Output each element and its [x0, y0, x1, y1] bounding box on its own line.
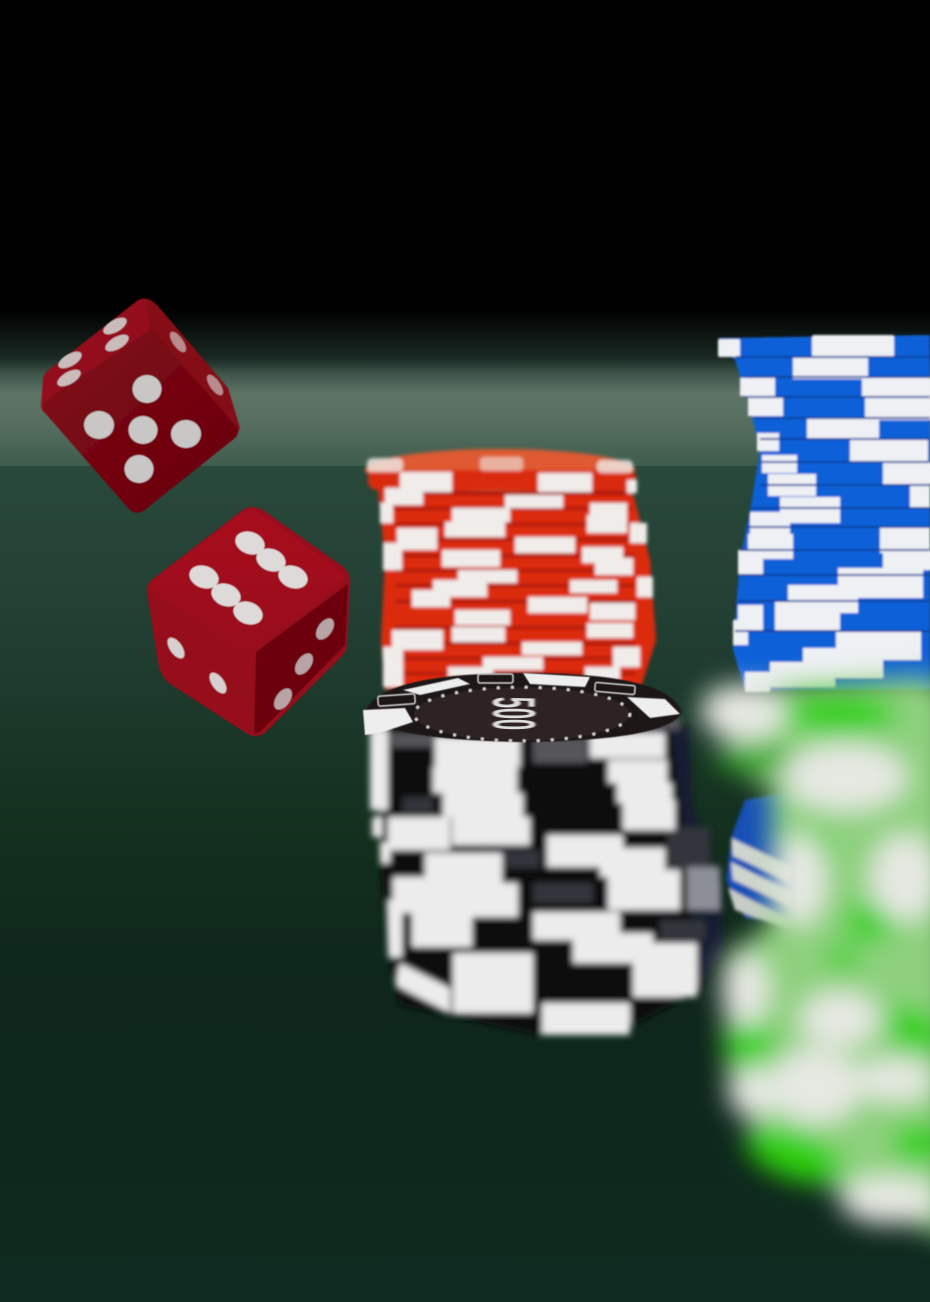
- top-right face: [146, 299, 240, 436]
- six pips: [186, 528, 311, 628]
- blue chip stack: [718, 335, 930, 692]
- right face: [254, 584, 348, 733]
- white edge stripes of top chip: [363, 673, 680, 735]
- green chip stack, out of focus: [701, 676, 930, 1240]
- chip corner marks: [378, 674, 635, 706]
- die: lower red die showing six: [147, 507, 350, 736]
- top-left face: [41, 299, 157, 413]
- die body: [147, 507, 350, 736]
- side pips: [164, 635, 230, 696]
- background: far table band: [0, 310, 930, 470]
- side pips: [55, 314, 131, 390]
- blue chip stack lower part: [726, 790, 800, 930]
- top chip of black stack: [365, 673, 682, 742]
- black chip stack: [363, 673, 724, 1035]
- die: upper red die showing five: [41, 299, 240, 513]
- centre disc of top chip: [414, 687, 630, 741]
- top face: [150, 509, 344, 652]
- front face: [43, 331, 238, 513]
- chip value label: 500: [480, 697, 545, 730]
- five pips: [84, 375, 201, 483]
- background: green table surface: [0, 466, 930, 1302]
- black stack body: [370, 717, 724, 1035]
- red chip stack: [365, 449, 656, 690]
